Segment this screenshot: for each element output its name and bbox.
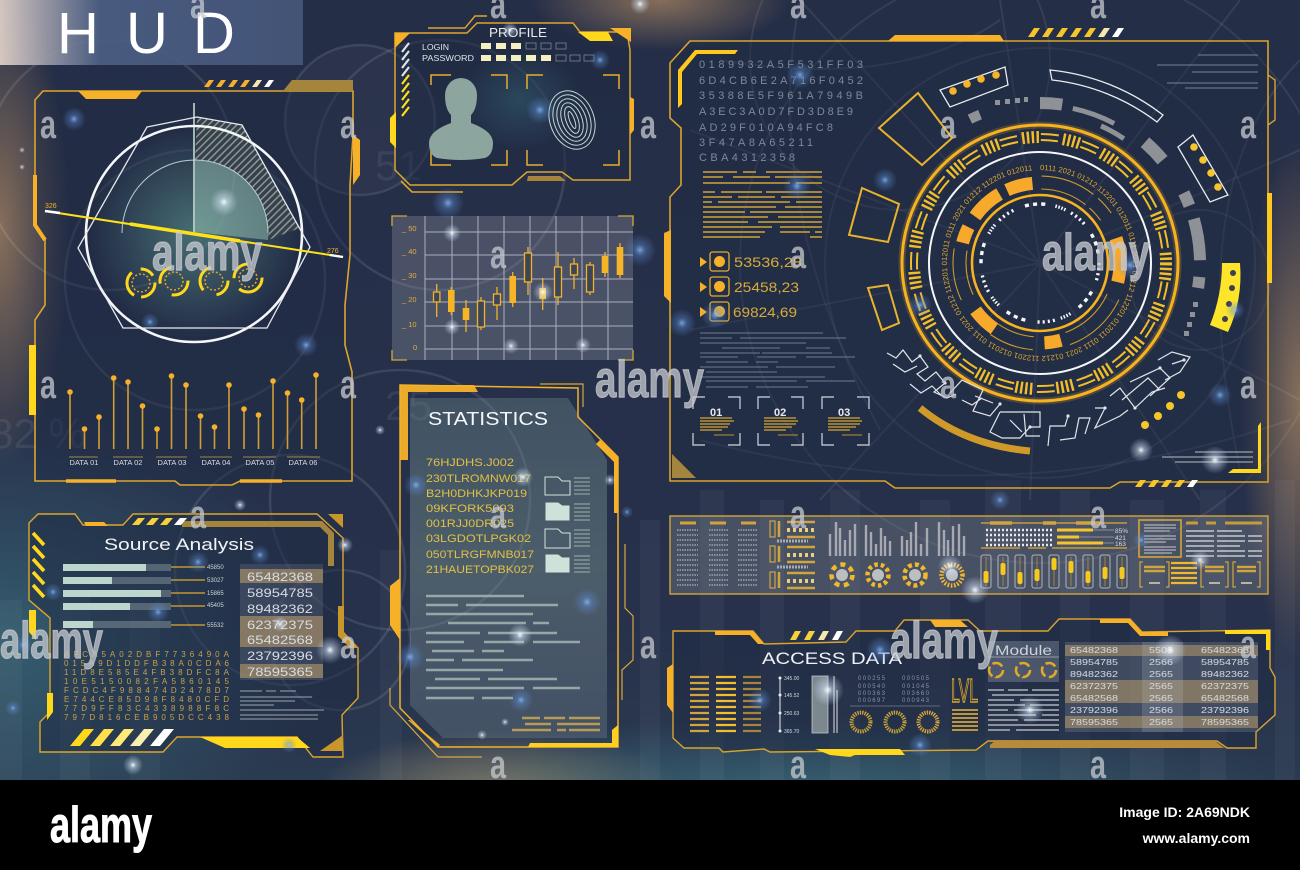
data table: 62372375 xyxy=(1201,681,1249,691)
data table: 2565 xyxy=(1149,693,1173,703)
heading: profile: PROFILE xyxy=(489,26,547,40)
watermark text: a xyxy=(1240,103,1257,147)
small numeric list: 000505 xyxy=(902,676,930,682)
heading: source analysis: Source Analysis xyxy=(104,535,254,554)
watermark text: alamy xyxy=(0,612,103,670)
footer band xyxy=(0,780,1300,870)
folder icons xyxy=(545,477,590,572)
sliders and readouts: 421 xyxy=(1115,535,1126,542)
heading: access data: ACCESS DATA xyxy=(762,650,902,668)
numbered brackets: 03 xyxy=(838,407,850,419)
watermark text: a xyxy=(790,233,807,277)
radar scope: 276 xyxy=(327,248,339,255)
gray arc segments xyxy=(880,103,1200,423)
module box: Module xyxy=(995,642,1052,658)
scale readout xyxy=(778,676,837,735)
candlestick chart xyxy=(392,216,633,360)
watermark text: a xyxy=(1090,743,1107,787)
small numeric list: 000363 xyxy=(858,691,886,697)
lollipop bar chart: DATA 04 xyxy=(202,458,230,467)
data table: 2566 xyxy=(1149,705,1173,715)
data table: 2565 xyxy=(1149,669,1173,679)
header band xyxy=(0,0,303,66)
white dotted arc boxes xyxy=(940,67,1228,202)
hex matrix: E744CE85D98F8480CFD xyxy=(64,695,229,704)
numbered brackets xyxy=(693,397,869,445)
small numeric list: 000943 xyxy=(902,698,930,704)
number table xyxy=(240,564,323,680)
number table: 78595365 xyxy=(247,665,313,679)
text columns xyxy=(677,523,758,585)
radar scope: 326 xyxy=(45,203,57,210)
hex matrix: 77D9FF83C4338988F8C xyxy=(64,704,229,713)
progress bars: 15865 xyxy=(207,591,224,597)
login fields xyxy=(422,43,594,63)
hex matrix: AFCA5A02DBF7736490A xyxy=(64,650,230,659)
hex code block: A3EC3A0D7FD3D8E9 xyxy=(699,106,853,118)
panel: access data: LVL xyxy=(951,672,978,709)
heading: statistics: STATISTICS xyxy=(428,409,548,429)
lollipop bar chart: DATA 01 xyxy=(70,458,98,467)
watermark text: a xyxy=(340,103,357,147)
watermark text: a xyxy=(190,493,207,537)
hex matrix: FCDC4F988474D2478D7 xyxy=(64,686,230,695)
data table: 58954785 xyxy=(1201,657,1249,667)
progress bars: 55532 xyxy=(207,623,224,629)
lollipop bar chart: DATA 03 xyxy=(158,458,186,467)
number table: 23792396 xyxy=(247,649,313,663)
data table: 65482568 xyxy=(1070,693,1118,703)
panel: access data xyxy=(667,619,1275,757)
footer image id: www.alamy.com xyxy=(1142,830,1250,846)
scale readout: 250.63 xyxy=(784,711,800,717)
small numeric list: 001045 xyxy=(902,684,930,690)
list of codes: B2H0DHKJKP019 xyxy=(426,488,527,500)
lollipop bar chart: DATA 05 xyxy=(246,458,274,467)
hex matrix: 015A9D1DDFB38A0CDA6 xyxy=(64,659,230,668)
warning stripes xyxy=(70,729,174,746)
data table: 65482368 xyxy=(1070,645,1118,655)
candlestick chart: _ 10 xyxy=(401,320,417,329)
value rows: 25458,23 xyxy=(734,279,799,295)
icon: user silhouette xyxy=(429,78,493,160)
watermark text: a xyxy=(1240,623,1257,667)
number table: 58954785 xyxy=(247,586,313,600)
list of codes: 21HAUETOPBK027 xyxy=(426,564,534,576)
small numeric list xyxy=(850,676,940,706)
scale readout: 145.52 xyxy=(784,693,800,699)
watermark text: a xyxy=(490,493,507,537)
progress bars: 45405 xyxy=(207,603,224,609)
lollipop bar chart: DATA 06 xyxy=(289,458,317,467)
list of codes: 03LGDOTLPGK02 xyxy=(426,533,531,545)
yellow dotted block xyxy=(1210,263,1240,332)
watermark text: a xyxy=(490,743,507,787)
sliders and readouts: 85% xyxy=(1115,528,1128,535)
candlestick chart: _ 20 xyxy=(401,295,417,304)
background: 25 xyxy=(385,382,432,429)
hex matrix xyxy=(64,650,230,722)
numbered brackets: 02 xyxy=(774,407,786,419)
number table: 89482362 xyxy=(247,602,313,616)
footer image id: Image ID: 2A69NDK xyxy=(1119,804,1250,820)
gold quadrilateral outlines xyxy=(849,93,952,330)
gauges xyxy=(127,264,262,297)
hex code block: 0189932A5F531FF03 xyxy=(699,59,863,71)
gold text block xyxy=(703,172,822,237)
panel: radar and data bars xyxy=(29,80,360,485)
candlestick chart: _ 30 xyxy=(401,271,417,280)
watermark text: alamy xyxy=(1042,224,1150,282)
watermark text: a xyxy=(340,363,357,407)
list of codes: 230TLROMNW017 xyxy=(426,473,531,485)
ring gauges xyxy=(852,712,938,732)
data table: 78595365 xyxy=(1201,717,1249,727)
small numeric list: 003660 xyxy=(902,691,930,697)
sliders and readouts xyxy=(981,523,1128,588)
watermark text: a xyxy=(790,493,807,537)
panel: statistics xyxy=(390,384,633,757)
list of codes: 09KFORK5093 xyxy=(426,503,514,515)
candlestick chart: _ 40 xyxy=(401,247,417,256)
candlestick chart: 0 xyxy=(413,343,417,352)
list of codes: 76HJDHS.J002 xyxy=(426,457,514,469)
hex code block: CBA4312358 xyxy=(699,152,795,164)
circuit traces xyxy=(887,350,1190,446)
panel: profile xyxy=(390,16,634,192)
radial code text: 0111 2021 01212 112201 012011 0111 2021 01212 112201 012011 0111 2021 01212 112201 012011 0111 2021 01212 112201 012011 0111 2021 01212 112201 012011 xyxy=(942,164,1138,362)
list of codes xyxy=(426,457,534,576)
list of codes: 001RJJ0DR025 xyxy=(426,518,514,530)
data table: 2566 xyxy=(1149,657,1173,667)
watermark text: alamy xyxy=(152,224,262,282)
radar scope xyxy=(45,103,343,342)
number table: 62372375 xyxy=(247,618,313,632)
lollipop bar chart xyxy=(67,372,320,467)
data table: 23792396 xyxy=(1201,705,1249,715)
data table: 78595365 xyxy=(1070,717,1118,727)
watermark text: a xyxy=(1240,363,1257,407)
hex code block: AD29F010A94FC8 xyxy=(699,122,833,134)
data table: 65482568 xyxy=(1201,693,1249,703)
watermark text: alamy xyxy=(890,612,998,670)
number table: 65482568 xyxy=(247,633,313,647)
background: 51 xyxy=(375,142,422,189)
progress bars: 45850 xyxy=(207,565,224,571)
title: HUD xyxy=(57,1,235,66)
text block xyxy=(426,596,580,698)
panel: main radial display xyxy=(664,28,1276,489)
hex code block: 3F47A8A65211 xyxy=(699,137,813,149)
candlestick chart: _ 50 xyxy=(401,224,417,233)
gray text block xyxy=(700,333,855,387)
right data block xyxy=(1139,520,1262,587)
data table: 2565 xyxy=(1149,681,1173,691)
data table: 89482362 xyxy=(1070,669,1118,679)
hex matrix: 797D816CEB905DCC438 xyxy=(64,713,230,722)
lollipop bar chart: DATA 02 xyxy=(114,458,142,467)
data table: 62372375 xyxy=(1070,681,1118,691)
progress bars: 53027 xyxy=(207,578,224,584)
login fields: PASSWORD xyxy=(422,54,474,63)
value rows: 69824,69 xyxy=(733,304,797,320)
scale readout: 345.00 xyxy=(784,676,800,682)
circular dial xyxy=(898,122,1182,404)
hex code block: 35388E5F961A7949B xyxy=(699,90,863,102)
data table xyxy=(1065,642,1258,732)
scale readout: 365.70 xyxy=(784,729,800,735)
footer image id xyxy=(1119,804,1250,846)
watermark text: a xyxy=(340,623,357,667)
module box xyxy=(988,641,1059,682)
LVL label xyxy=(951,672,978,730)
sun gauges xyxy=(832,564,962,586)
data table: 23792396 xyxy=(1070,705,1118,715)
hex matrix: 10E5150082FA5860145 xyxy=(64,677,230,686)
watermark text: a xyxy=(40,363,57,407)
panel: source analysis xyxy=(29,514,358,757)
panel: instrument strip xyxy=(670,516,1268,594)
watermark text: a xyxy=(640,103,657,147)
watermark text: a xyxy=(940,103,957,147)
login fields: LOGIN xyxy=(422,43,449,52)
corner brackets xyxy=(431,75,619,165)
data table: 2565 xyxy=(1149,717,1173,727)
small numeric list: 000540 xyxy=(858,684,886,690)
small numeric list: 000697 xyxy=(858,698,886,704)
watermark text: alamy xyxy=(595,351,704,409)
yellow dots xyxy=(1141,391,1185,429)
mini bar charts xyxy=(830,522,964,556)
watermark text: a xyxy=(1090,493,1107,537)
value rows: 53536,28 xyxy=(734,254,802,270)
gold arc xyxy=(920,408,1030,451)
number table: 65482368 xyxy=(247,570,313,584)
progress bars xyxy=(63,564,224,629)
sliders and readouts: 163 xyxy=(1115,541,1126,548)
watermark text: a xyxy=(940,363,957,407)
data table: 89482362 xyxy=(1201,669,1249,679)
switch icons xyxy=(770,521,815,588)
hex matrix: 11D8E585E4FB38DFC8A xyxy=(64,668,230,677)
data table: 58954785 xyxy=(1070,657,1118,667)
watermark text: a xyxy=(790,743,807,787)
data table: 5503 xyxy=(1149,645,1173,655)
list of codes: 050TLRGFMNB017 xyxy=(426,549,534,561)
hex code block xyxy=(699,59,863,164)
hex code block: 6D4CB6E2A716F0452 xyxy=(699,75,863,87)
watermark text: a xyxy=(640,623,657,667)
small numeric list: 000255 xyxy=(858,676,886,682)
watermark text: a xyxy=(490,233,507,277)
footer logo: alamy xyxy=(50,797,152,853)
gold line columns xyxy=(690,677,761,731)
numbered brackets: 01 xyxy=(710,407,722,419)
value rows xyxy=(700,252,802,321)
data table: 65482368 xyxy=(1201,645,1249,655)
watermark text: a xyxy=(40,103,57,147)
icon: fingerprint xyxy=(541,84,603,156)
